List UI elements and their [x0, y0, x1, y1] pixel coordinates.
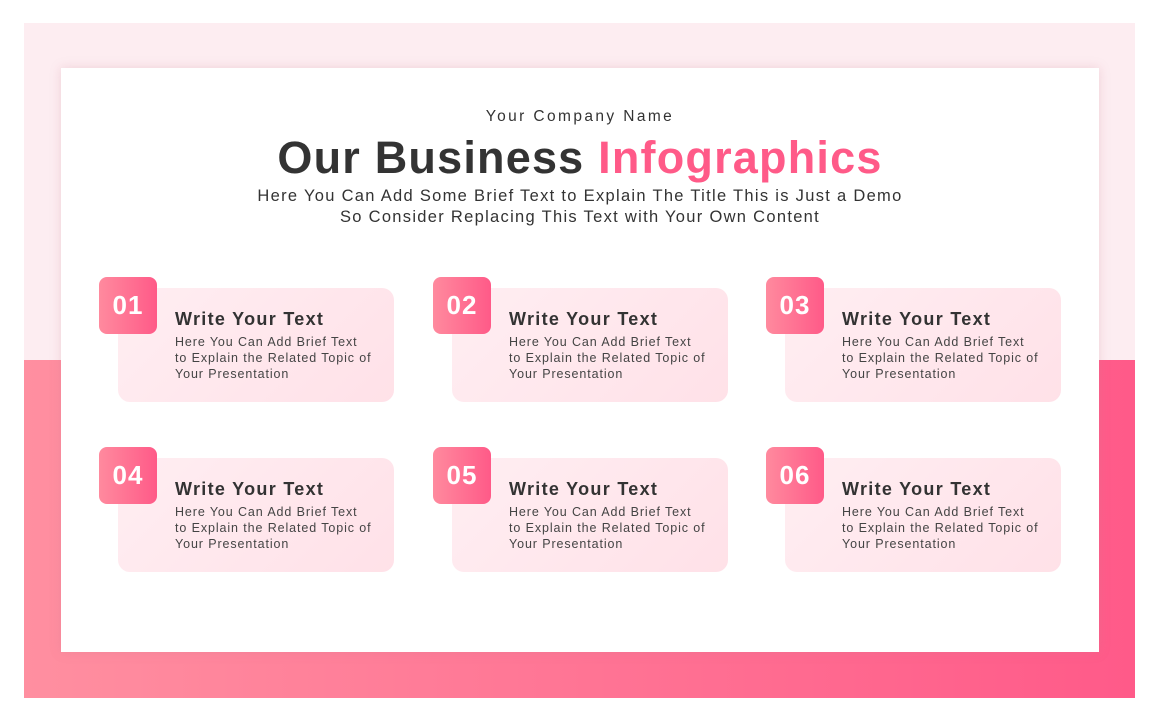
- card 01: Write Your Text: [175, 309, 324, 329]
- card 01: Your Presentation: [175, 367, 289, 381]
- card 03: to Explain the Related Topic of: [842, 351, 1039, 365]
- card 05: Your Presentation: [509, 537, 623, 551]
- card 01: Here You Can Add Brief Text: [175, 335, 358, 349]
- card 02: to Explain the Related Topic of: [509, 351, 706, 365]
- card 05: Write Your Text: [509, 479, 658, 499]
- card 04: Write Your Text: [175, 479, 324, 499]
- card 06: 06: [780, 460, 810, 490]
- card 06: Here You Can Add Brief Text: [842, 505, 1025, 519]
- card 03: 03: [780, 290, 810, 320]
- card 06: [766, 447, 1061, 572]
- white panel: [61, 68, 1099, 652]
- background frame bottom: [24, 360, 1135, 698]
- card 05: Here You Can Add Brief Text: [509, 505, 692, 519]
- subtitle: [257, 187, 903, 226]
- card 03: Your Presentation: [842, 367, 956, 381]
- card 04: Your Presentation: [175, 537, 289, 551]
- card 06: to Explain the Related Topic of: [842, 521, 1039, 535]
- card 06: Your Presentation: [842, 537, 956, 551]
- card 03: Here You Can Add Brief Text: [842, 335, 1025, 349]
- card 03: [766, 277, 1061, 402]
- card 01: to Explain the Related Topic of: [175, 351, 372, 365]
- card 05: [433, 447, 728, 572]
- card 01: [99, 277, 394, 402]
- card 04: Here You Can Add Brief Text: [175, 505, 358, 519]
- card 02: Here You Can Add Brief Text: [509, 335, 692, 349]
- card 03: Write Your Text: [842, 309, 991, 329]
- card 02: Your Presentation: [509, 367, 623, 381]
- card 02: 02: [447, 290, 477, 320]
- company name: Your Company Name: [486, 108, 674, 125]
- card 02: [433, 277, 728, 402]
- card 06: Write Your Text: [842, 479, 991, 499]
- card 05: to Explain the Related Topic of: [509, 521, 706, 535]
- title: Our Business Infographics: [277, 132, 883, 183]
- card 04: to Explain the Related Topic of: [175, 521, 372, 535]
- background frame top: [24, 23, 1135, 360]
- card 04: 04: [113, 460, 143, 490]
- card 01: 01: [113, 290, 143, 320]
- card 04: [99, 447, 394, 572]
- subtitle: Here You Can Add Some Brief Text to Explain The Title This is Just a Demo: [257, 187, 903, 205]
- subtitle: So Consider Replacing This Text with Your Own Content: [340, 208, 820, 226]
- card 05: 05: [447, 460, 477, 490]
- card 02: Write Your Text: [509, 309, 658, 329]
